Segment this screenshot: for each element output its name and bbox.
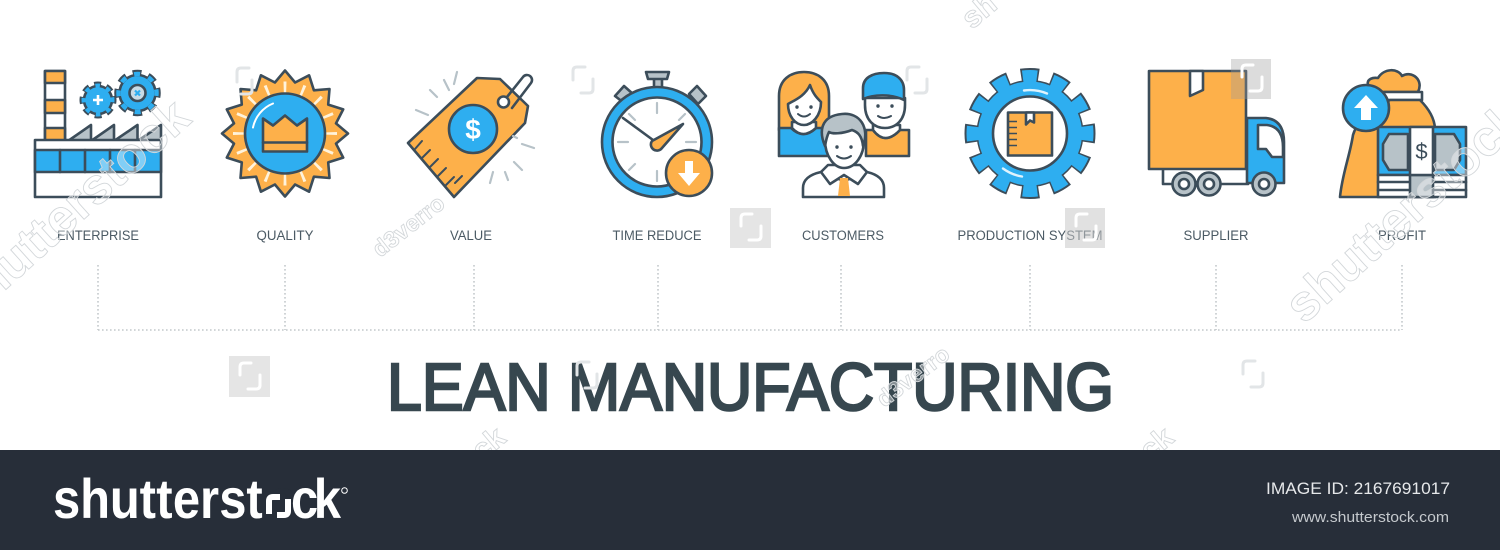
icon: enterprise factory [35,71,161,197]
connector: dotted lines joining items to title [98,265,1402,330]
icon: production system gear [972,76,1088,192]
label: value: VALUE [450,228,492,243]
label: profit: PROFIT [1378,228,1426,243]
footer logo wordmark: shutterstock [53,468,342,531]
man with cap [863,73,909,156]
footer image id: IMAGE ID: 2167691017 [1266,479,1450,498]
icon: quality badge [222,70,348,196]
icon: time reduce stopwatch [602,72,712,197]
label: enterprise: ENTERPRISE [57,228,139,243]
icon: value price tag [408,72,534,197]
watermark overlay: d3verro [871,340,954,412]
watermark overlay: d3verro [367,190,450,262]
woman [779,72,829,156]
title: LEAN MANUFACTURING [387,350,1114,425]
footer bar [0,450,1500,550]
footer registered mark [342,488,347,493]
watermark overlay: ck [1133,420,1180,467]
label: customers: CUSTOMERS [802,228,884,243]
icon: profit money bag [1340,70,1466,197]
label: supplier: SUPPLIER [1184,228,1249,243]
icon: supplier truck [1149,71,1284,196]
icon: profit money bag: $ [1415,139,1428,164]
icon: value price tag: $ [465,114,481,145]
label: time reduce: TIME REDUCE [612,228,702,243]
label: production system: PRODUCTION SYSTEM [958,228,1102,243]
label: quality: QUALITY [256,228,314,243]
man in front [803,114,884,197]
watermark overlay: ck [465,420,512,467]
icon: customers group [779,72,909,197]
footer site url: www.shutterstock.com [1291,509,1449,526]
